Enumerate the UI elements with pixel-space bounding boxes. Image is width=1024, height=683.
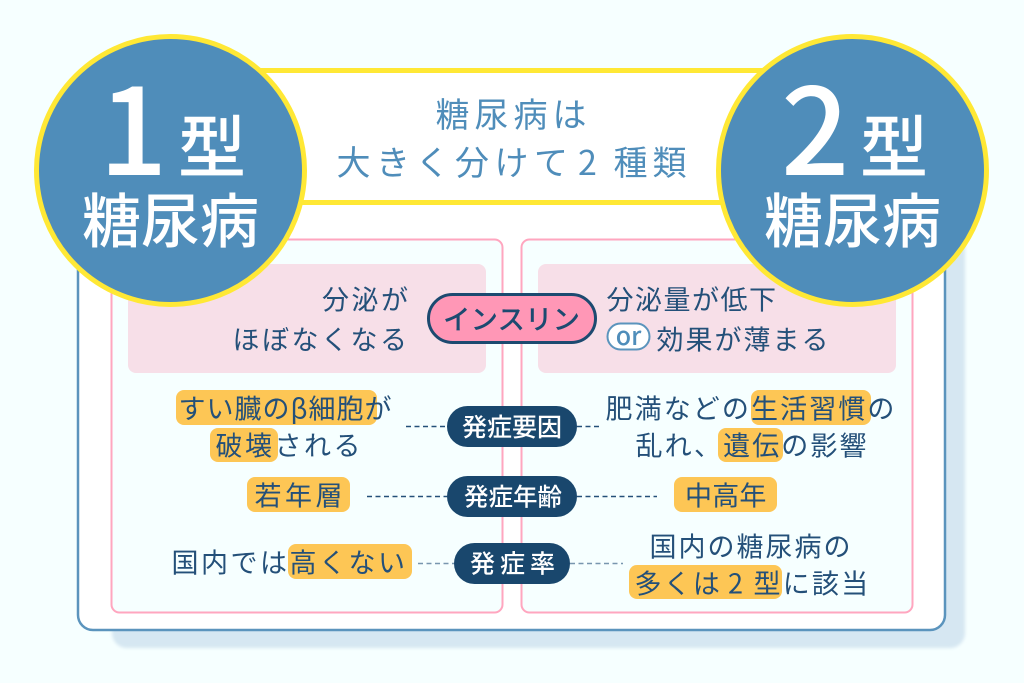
panel shadow [112, 180, 965, 648]
label: insulin: インスリン [443, 297, 580, 337]
cause text: type 1 [176, 388, 393, 464]
panel: type 1 column [112, 240, 502, 612]
label: onset cause: 発症要因 [462, 408, 562, 444]
dashed connectors [367, 426, 657, 564]
title box: 糖尿病は [436, 88, 592, 137]
insulin effect box: type 2: 効果が薄まる [656, 318, 830, 358]
cause text: type 2 [606, 388, 896, 464]
label: onset cause [447, 406, 577, 447]
label: incidence: 発症率 [470, 544, 560, 580]
incidence text: type 2: 国内の糖尿病の [650, 526, 852, 564]
onset age text: type 2: 中高年 [685, 474, 767, 514]
circle: type 2 diabetes: 糖尿病 [764, 174, 941, 260]
insulin effect box: type 1: 分泌が [322, 278, 410, 318]
circle: type 2 diabetes [718, 36, 986, 304]
insulin effect box: type 1: ほぼなくなる [232, 318, 410, 358]
cause text: type 2: 肥満などの生活習慣の [606, 388, 896, 426]
insulin effect box: type 2: 分泌量が低下 [606, 278, 778, 318]
label: insulin [428, 294, 596, 342]
circle: type 1 diabetes: 糖尿病 [82, 174, 259, 260]
label: onset age [447, 476, 577, 517]
panel: type 2 column [522, 240, 912, 612]
incidence text: type 1: 国内では高くない [172, 542, 408, 580]
circle: type 1 diabetes [36, 36, 304, 304]
title box: 2 [578, 136, 597, 185]
incidence text: type 2 [629, 526, 870, 602]
circle: type 2 diabetes: 2 [781, 36, 849, 210]
cause text: type 1: すい臓のβ細胞が [178, 388, 393, 426]
title box: 種類 [614, 136, 692, 185]
incidence text: type 2: 多くは [634, 562, 722, 602]
title box: 大きく分けて [336, 136, 574, 185]
outer panel [78, 150, 945, 630]
title box [230, 70, 800, 202]
onset age text: type 1: 若年層 [254, 474, 346, 514]
incidence text: type 2: 型に該当 [754, 562, 870, 602]
cause text: type 2: 乱れ、遺伝の影響 [636, 424, 869, 464]
circle: type 2 diabetes: 型 [860, 93, 928, 192]
label: incidence [454, 543, 570, 584]
cause text: type 1: 破壊される [216, 424, 363, 464]
circle: type 1 diabetes: 型 [178, 93, 246, 192]
incidence text: type 2: 2 [728, 562, 743, 602]
label: onset age: 発症年齢 [464, 478, 562, 514]
insulin effect box: type 2 [538, 264, 896, 373]
circle: type 1 diabetes: 1 [99, 36, 167, 210]
insulin effect box: type 1 [128, 264, 486, 373]
insulin effect box: type 2: or [616, 317, 642, 353]
